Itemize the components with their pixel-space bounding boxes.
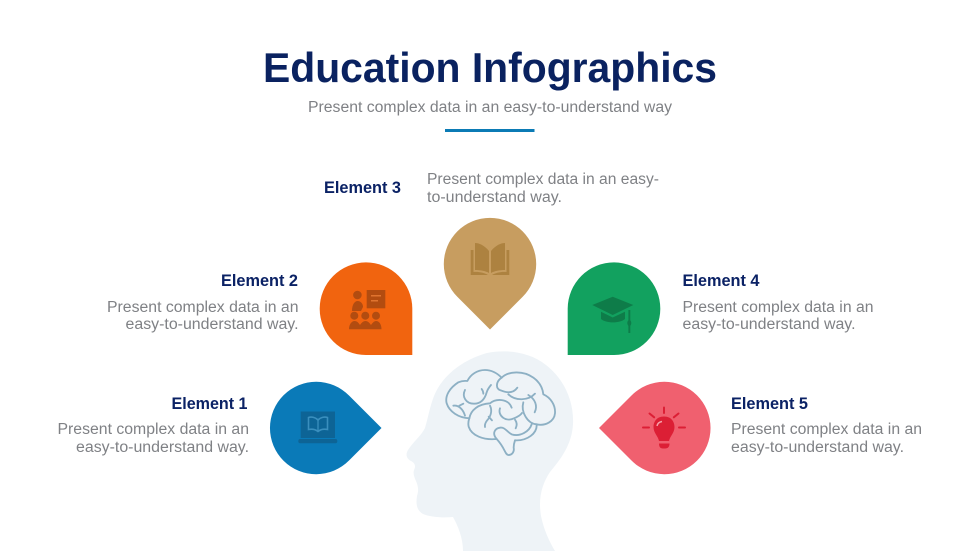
icon: brain [446,370,555,455]
head silhouette with brain [407,351,573,551]
element 5 text: Element 5 [731,395,808,413]
element 2 text: Present complex data in an [107,299,298,316]
element 2 text: easy-to-understand way. [126,316,298,333]
element 4 pin [568,262,660,355]
element 4 text: easy-to-understand way. [682,316,856,333]
element 5 text: Present complex data in an [731,421,922,438]
title: Education Infographics [263,44,717,91]
element 2 text: Element 2 [221,272,298,290]
title underline [445,129,534,132]
element 3 text: to-understand way. [427,189,562,206]
element 3 pin [444,218,536,330]
icon: light bulb [643,408,685,448]
element 4 text: Present complex data in an [682,299,874,316]
element 1 pin [270,382,382,474]
element 5 text: easy-to-understand way. [731,439,904,456]
element 3 text: Present complex data in an easy- [427,171,659,188]
element 3 text: Element 3 [324,179,401,197]
element 1 text: Present complex data in an [58,421,249,438]
icon: laptop with book [298,412,337,443]
element 5 text [731,395,922,456]
element 1 text [58,395,249,456]
icon: teacher and students [349,290,385,329]
element 2 text [107,272,298,333]
element 4 text: Element 4 [682,272,760,290]
element 3 text [324,171,659,206]
element 1 text: easy-to-understand way. [76,439,249,456]
element 2 pin [320,262,412,355]
element 5 pin [599,382,711,474]
subtitle: Present complex data in an easy-to-understand way [308,99,672,116]
element 1 text: Element 1 [172,395,248,413]
icon: open book [471,243,509,275]
icon: graduation cap [592,297,633,333]
element 4 text [682,272,874,333]
